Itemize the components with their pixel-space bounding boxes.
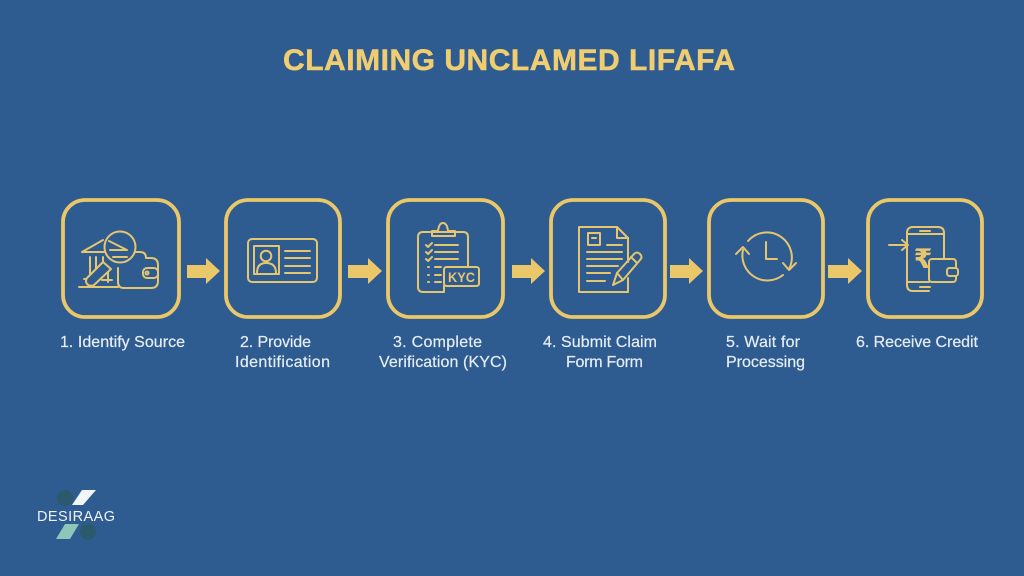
step 5 label: Processing (726, 354, 805, 371)
icon: bank, magnifier and wallet (79, 232, 158, 288)
step 2: provide identification (226, 200, 340, 371)
step 5: wait for processing (709, 200, 823, 371)
step 5 box (709, 200, 823, 317)
arrow 2 to 3 (348, 258, 382, 284)
title: CLAIMING UNCLAMED LIFAFA (283, 44, 735, 77)
icon text: rupee sign: ₹ (914, 244, 932, 274)
step 4 label: 4. Submit Claim (543, 334, 657, 351)
logo wordmark: DESIRAAG (37, 509, 115, 525)
step 6 box (868, 200, 982, 317)
step 3 label: 3. Complete (393, 334, 482, 351)
step 1 box (63, 200, 179, 317)
step 5 label: 5. Wait for (726, 334, 801, 351)
icon: phone outline and arrow (889, 227, 944, 291)
step 2 label: Identification (235, 354, 330, 371)
step 2 label: 2. Provide (240, 334, 311, 351)
step 6: receive credit (856, 200, 982, 351)
step 4 label (543, 334, 657, 371)
icon: form and pen (579, 227, 642, 292)
logo: Desiraag (37, 490, 115, 540)
step 4 box (551, 200, 665, 317)
step 4 label: Form Form (566, 354, 643, 371)
icon text: KYC: KYC (448, 269, 475, 285)
step 3 label (379, 334, 507, 371)
arrow 3 to 4 (512, 258, 545, 284)
arrow 5 to 6 (828, 258, 862, 284)
icon: id card (248, 239, 317, 282)
icon: clock with circular arrows (736, 232, 796, 280)
step 1: identify source (60, 200, 185, 351)
step 6 label: 6. Receive Credit (856, 334, 979, 351)
step 2 box (226, 200, 340, 317)
icon: wallet (929, 259, 958, 282)
step 2 label (235, 334, 330, 371)
icon: KYC clipboard (418, 223, 479, 292)
step 4: submit claim form (543, 200, 665, 371)
step 5 label (726, 334, 805, 371)
step 3 box (388, 200, 503, 317)
logo mark (56, 490, 96, 540)
step 3 label: Verification (KYC) (379, 354, 507, 371)
arrow 1 to 2 (187, 258, 220, 284)
arrow 4 to 5 (670, 258, 703, 284)
step 1 label: 1. Identify Source (60, 334, 185, 351)
step 3: complete verification (379, 200, 507, 371)
